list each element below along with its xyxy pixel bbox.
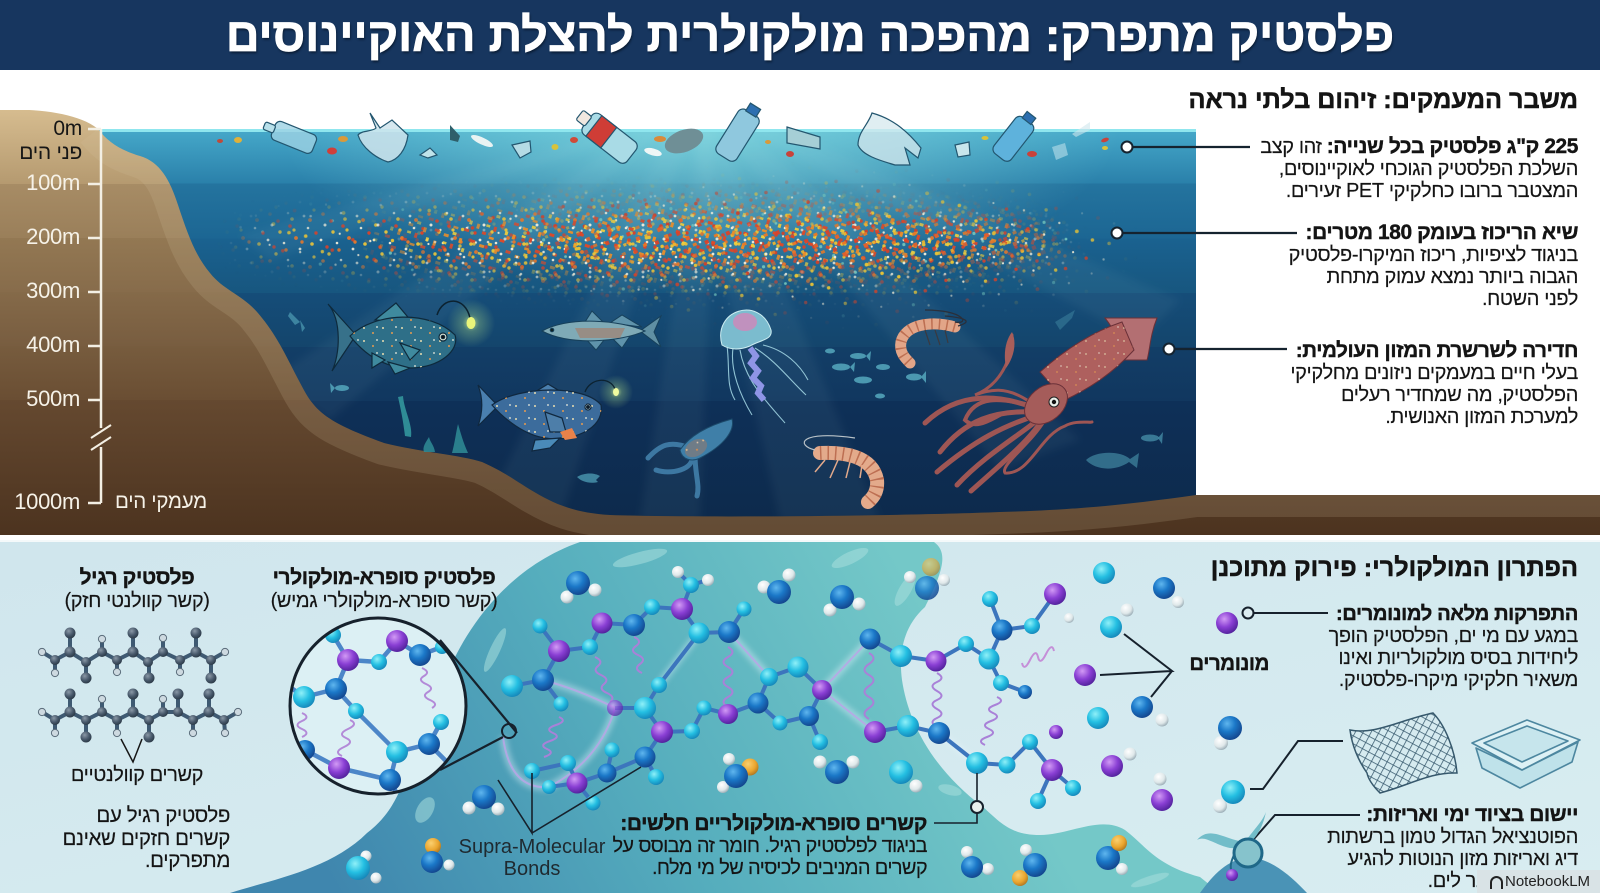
text block: 225 kg: השלכת הפלסטיק הגוכחי לאוקיינוסים, [1279,158,1578,180]
shrimp upper [901,310,966,363]
heading: regular plastic: (קשר קוולנטי חזק) [65,590,209,612]
seabed and depth slope [0,110,1600,535]
depth labels: 100m [26,170,80,195]
blue bottle [714,100,766,164]
text block: full breakdown: התפרקות מלאה למונומרים: [1336,603,1578,625]
fragments [420,122,1090,160]
text block: 225 kg [1260,135,1578,202]
text block: full breakdown [1328,603,1578,691]
depth labels: 300m [26,278,80,303]
application callout lines [1250,741,1360,840]
text block: applications: הפוטנציאל הגדול טמון ברשתות [1327,826,1578,848]
text block: 225 kg: 225 ק"ג פלסטיק בכל שנייה: זהו קצב [1260,135,1578,158]
text block: full breakdown: ליחידות בסיס מולקולריות ואינו [1338,647,1578,669]
text block: applications [1327,803,1578,892]
text block: 225 kg: המצטבר ברובו כחלקיקי PET זעירים. [1286,180,1578,202]
monomer callout [1242,608,1328,618]
small fish school [288,310,1163,483]
watermark: NotebookLM [1477,870,1600,893]
panel: deep ocean crisis [0,70,1600,540]
callout leader: food chain [1164,344,1287,354]
text block: food chain: למערכת המזון האנושית. [1385,406,1578,428]
jellyfish [721,310,808,423]
callout leader: surface [1122,142,1250,152]
depth labels: מעמקי הים [115,490,207,513]
bottle [261,116,318,155]
water droplet [1197,812,1266,881]
depth ruler [88,129,111,503]
section heading: deep crisis: משבר המעמקים: זיהום בלתי נראה [1188,86,1578,114]
seaweed [398,396,468,453]
marine plastic at the surface [217,100,1109,166]
heading: supramolecular plastic: פלסטיק סופרא-מולקולרי [273,566,495,589]
text block: peak at 180 m: לפני השטח. [1482,288,1578,310]
section heading: molecular solution: הפתרון המולקולרי: פירוק מתוכנן [1211,554,1578,582]
food container [1472,720,1580,788]
text block: weak bonds: קשרים המניבים לכיסיה של מי מלח. [652,857,927,879]
blue bottle right [991,108,1041,164]
text: regular plastic note: פלסטיק רגיל עם [96,804,230,827]
label: monomers: מונומרים [1189,653,1269,675]
text block: applications: בסופו של דבר לים. [1428,870,1578,892]
text block: weak bonds [612,812,927,879]
label: Supra-Molecular Bonds: Supra-Molecular [459,836,605,858]
depth labels: 400m [26,332,80,357]
text block: peak at 180 m: הגבוה ביותר נמצא עמוק מתחת [1326,266,1578,288]
text block: food chain [1290,339,1578,428]
text block: applications: דיג ואריזות מזון הנוטות להגיע [1347,848,1578,870]
watermark: NotebookLM: NotebookLM [1505,873,1590,890]
magnifier circle detail [280,618,517,800]
text block: full breakdown: במגע עם מי ים, הפלסטיק הופך [1329,625,1578,647]
text block: peak at 180 m: שיא הריכוז בעומק 180 מטרים: [1306,221,1578,244]
panel background [0,542,1600,893]
squid [925,318,1157,491]
text: regular plastic note: קשרים חזקים שאינם [62,826,230,850]
ocean water with depth bands [60,129,1196,529]
label: Supra-Molecular Bonds: Bonds [504,858,560,880]
depth labels [14,117,207,514]
heading: supramolecular plastic [271,566,497,612]
water molecules and monomers [346,558,1245,886]
text block: food chain: חדירה לשרשרת המזון העולמית: [1296,339,1578,362]
seawater blob [230,542,1307,893]
slender fish [542,311,661,350]
label: covalent bonds: קשרים קוולנטיים [71,764,203,786]
text block: food chain: הפלסטיק, מה שמחדיר רעלים [1341,384,1578,406]
title banner [0,0,1600,72]
text block: applications: יישום בציוד ימי ואריזות: [1366,803,1578,826]
anglerfish lower [478,375,633,451]
text block: weak bonds: בניגוד לפלסטיק רגיל. חומר זה מבוסס על [612,835,927,857]
text block: weak bonds: קשרים סופרא-מולקולריים חלשים: [620,812,927,835]
text block: peak at 180 m: בניגוד לציפיות, ריכוז המיקרו-פלסטיק [1289,244,1578,266]
anglerfish upper [328,299,495,374]
heading: regular plastic [65,566,209,612]
text block: full breakdown: משאיר חלקיקי מיקרו-פלסטיק. [1339,669,1578,691]
depth labels: 500m [26,386,80,411]
large plastic bag [858,113,921,165]
text block: peak at 180 m [1289,221,1578,310]
label: 0m surface: פני הים [19,141,82,164]
text: regular plastic note: מתפרקים. [145,849,230,872]
label: 0m surface: 0m [53,117,82,140]
depth labels: 200m [26,224,80,249]
title: פלסטיק מתפרק: מהפכה מולקולרית להצלת האוקיינוסים [226,9,1394,61]
coloured bits [217,136,1109,157]
blue squid creature [648,419,733,496]
depth labels: 1000m [14,489,80,514]
microplastic cloud [228,171,1127,324]
callout leader: peak concentration [1112,228,1297,238]
text block: food chain: בעלי חיים במעמקים ניזונים מחלקיקי [1290,362,1578,384]
plastic bag [358,113,408,162]
heading: supramolecular plastic: (קשר סופרא-מולקולרי גמיש) [271,590,497,612]
shrimp lower [804,436,877,502]
panel: molecular solution [0,542,1600,893]
text: regular plastic note [62,804,230,872]
fishing net [1350,713,1457,793]
supramolecular network [501,566,1081,810]
heading: regular plastic: פלסטיק רגיל [80,566,194,589]
bond callout lines [498,634,1172,833]
regular plastic chains [38,628,242,762]
label: 0m surface [19,117,82,164]
red bottle [572,105,640,166]
